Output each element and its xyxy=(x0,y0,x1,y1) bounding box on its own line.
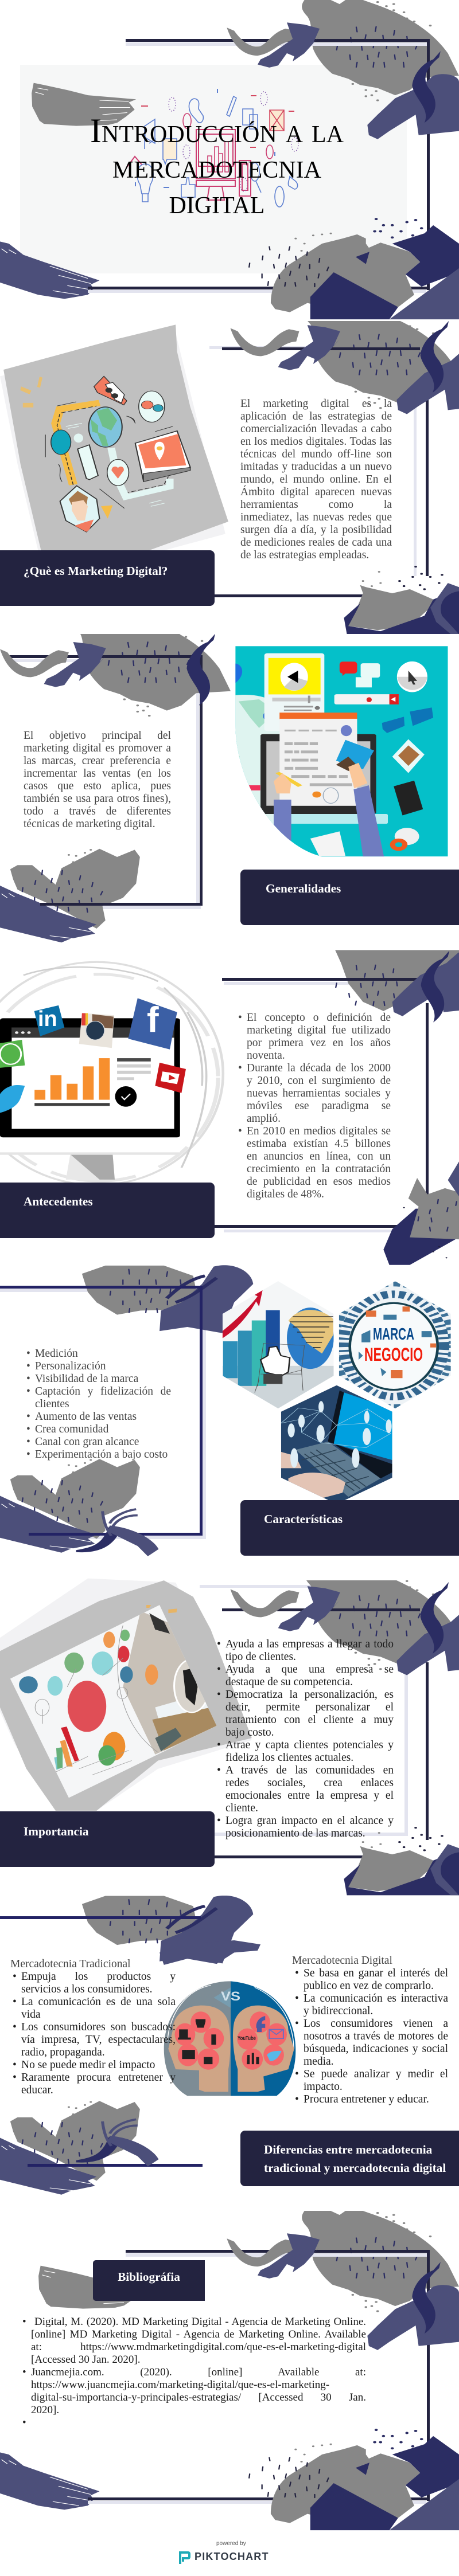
list: importancia: destaque de su competencia. xyxy=(225,1676,353,1688)
text block: traditional marketing: Empuja los productos y xyxy=(21,1971,176,1983)
text block: digital marketing: media. xyxy=(304,2056,334,2068)
text block: digital marketing: nosotros a través de motores de xyxy=(304,2030,448,2042)
text block: marketing objective xyxy=(24,730,171,830)
text block: digital marketing: y bidireccional. xyxy=(304,2005,373,2017)
list: antecedentes: de publicidad en esos medios xyxy=(247,1176,391,1188)
text block: marketing definition: comercialización llevadas a cabo xyxy=(240,423,392,435)
text block: traditional marketing: educar. xyxy=(21,2084,53,2096)
list: importancia: cliente. xyxy=(225,1802,258,1814)
text block: traditional marketing: vía impresa, TV, espectaculares, xyxy=(21,2034,176,2046)
bibliography splashes over frame xyxy=(227,2233,459,2530)
text block: marketing objective: marketing digital es promover a xyxy=(24,742,171,754)
panel: differences label: Diferencias entre mercadotecnia xyxy=(264,2143,432,2156)
list: importancia: Logra gran impacto en el alcance y xyxy=(225,1815,394,1827)
text block: marketing definition: imitadas y traducidas a un nuevo xyxy=(240,461,392,473)
title: digital xyxy=(169,183,264,221)
text block: marketing definition: El marketing digital es la xyxy=(240,398,392,410)
image labels: VS and YouTube: VS xyxy=(221,1989,240,2003)
list: antecedentes: noventa. xyxy=(247,1050,285,1062)
text block: digital marketing: Se basa en ganar el interés del xyxy=(304,1967,448,1979)
list: importancia: Atrae y capta clientes potenciales y xyxy=(225,1739,394,1751)
list: importancia: emocionales entre la empresa y el xyxy=(225,1790,394,1802)
section: what is marketing decorations xyxy=(0,308,459,634)
image: monitor with social networks xyxy=(0,962,223,1185)
image: tilted paper with strategy photo xyxy=(0,1579,252,1811)
text block: marketing definition xyxy=(240,398,392,561)
list: bibliography: at: https://www.mdmarketingdigital.com/que-es-el-marketing-digital xyxy=(31,2341,366,2353)
text block: marketing definition: en los medios digitales. Todas las xyxy=(240,436,392,448)
text block: marketing objective: todo a través de diferentes xyxy=(24,805,171,817)
text block: marketing objective: también se usa para otros fines), xyxy=(24,793,171,805)
list: bibliography: digital-su-importancia-y-principales-estrategias/ [Accessed 30 Jan. xyxy=(31,2391,366,2403)
list: bibliography xyxy=(23,2316,366,2424)
list: bibliography: https://www.juancmejia.com/marketing-digital/que-es-el-marketing- xyxy=(31,2379,329,2391)
list: bibliography: 2020]. xyxy=(31,2404,59,2416)
list: antecedentes: Durante la década de los 2000 xyxy=(247,1062,391,1074)
list: importancia: tratamiento con el cliente a muy xyxy=(225,1714,394,1726)
social logos xyxy=(38,1000,159,1040)
text block: digital marketing: Mercadotecnia Digital xyxy=(292,1955,392,1967)
text block: digital marketing: Los consumidores vienen a xyxy=(304,2018,448,2030)
list: antecedentes: en anuncios en línea, con un xyxy=(247,1150,391,1162)
text block: marketing objective: técnicas de marketing digital. xyxy=(24,818,155,830)
list: importancia: fideliza los clientes actuales. xyxy=(225,1752,353,1764)
social logos: f xyxy=(147,1000,159,1040)
text block: digital marketing: impacto. xyxy=(304,2081,343,2093)
text block: marketing definition: herramientas como la xyxy=(240,499,392,511)
section: importancia decorations xyxy=(0,1569,459,1895)
section: bibliography decorations xyxy=(0,2211,459,2510)
image labels: VS and YouTube: YouTube xyxy=(238,2035,256,2042)
list: caracteristicas: Crea comunidad xyxy=(35,1423,108,1435)
panel: bibliography label: Bibliográfia xyxy=(118,2270,180,2284)
icon: piktochart logo xyxy=(179,2551,190,2564)
text block: traditional marketing: vida xyxy=(21,2009,41,2021)
text block: marketing objective: incrementar las ventas (en los xyxy=(24,768,171,780)
list: antecedentes: amplió. xyxy=(247,1113,281,1125)
text block: traditional marketing xyxy=(10,1958,176,2096)
text block: traditional marketing: radio, propaganda. xyxy=(21,2046,105,2058)
panel: importancia label: Importancia xyxy=(24,1825,89,1838)
list: antecedentes xyxy=(239,1012,391,1200)
title xyxy=(90,112,344,221)
panel: antecedentes label: Antecedentes xyxy=(24,1195,93,1208)
text block: marketing objective: El objetivo principal del xyxy=(24,730,171,742)
section: caracteristicas decorations xyxy=(0,1265,452,1556)
list: importancia: posicionamiento de las marcas. xyxy=(225,1827,365,1839)
title: Introducción a la xyxy=(90,112,344,150)
panel: antecedentes label xyxy=(0,1183,215,1238)
image: three hexagon photos xyxy=(223,1281,452,1504)
list: caracteristicas: clientes xyxy=(35,1398,69,1410)
list: importancia: bajo costo. xyxy=(225,1727,274,1739)
list: caracteristicas: Visibilidad de la marca xyxy=(35,1373,138,1385)
list: antecedentes: El concepto o definición de xyxy=(247,1012,391,1024)
image: digital marketing illustration xyxy=(0,324,228,554)
list: antecedentes: marketing digital fue utilizado xyxy=(247,1024,391,1036)
text block: traditional marketing: No se puede medir el impacto xyxy=(21,2059,155,2071)
panel: what is marketing label xyxy=(0,550,215,606)
panel: caracteristicas label xyxy=(240,1500,459,1556)
list: caracteristicas xyxy=(27,1348,171,1461)
panel: differences label xyxy=(240,2131,459,2186)
hexagon caption: marca negocio: NEGOCIO xyxy=(364,1344,423,1365)
text block: digital marketing xyxy=(292,1955,448,2105)
list: antecedentes: crecimiento en la contratación xyxy=(247,1163,391,1175)
image: traditional versus digital heads xyxy=(164,1981,295,2096)
panel: generalidades label xyxy=(240,870,459,925)
section: diferencias decorations xyxy=(0,1896,295,2195)
list: importancia: A través de las comunidades en xyxy=(225,1764,394,1776)
list: importancia: decir, permite personalizar el xyxy=(225,1701,394,1713)
list: importancia: redes sociales, crea enlaces xyxy=(225,1777,394,1789)
panel: caracteristicas label: Características xyxy=(264,1512,343,1526)
list: caracteristicas: Medición xyxy=(35,1348,78,1360)
text block: marketing definition: surgen día a día, y la posibilidad xyxy=(240,524,392,536)
section: title decorations xyxy=(0,0,459,299)
text block: digital marketing: búsqueda, indicaciones y social xyxy=(304,2043,448,2055)
social logos: in xyxy=(38,1007,57,1031)
text block: marketing objective: casos que esto aplica, pues xyxy=(24,780,171,792)
text block: traditional marketing: La comunicación es de una sola xyxy=(21,1996,176,2008)
panel: what is marketing label: ¿Què es Marketing Digital? xyxy=(24,564,168,578)
powered by caption: powered by xyxy=(216,2540,246,2547)
list: importancia: Democratiza la personalización, es xyxy=(225,1689,394,1701)
title background panel xyxy=(20,65,407,273)
text block: traditional marketing: Mercadotecnia Tradicional xyxy=(10,1958,131,1970)
panel: bibliography label xyxy=(93,2260,205,2301)
section: antecedentes decorations xyxy=(0,950,459,1265)
text block: marketing definition: de las estrategias empleadas. xyxy=(240,549,369,561)
text block: marketing definition: mundo, el mundo online. En el xyxy=(240,473,392,486)
navy curl xyxy=(76,1509,159,1556)
text block: marketing definition: inmediatez, las nuevas redes que xyxy=(240,511,392,523)
list: importancia xyxy=(217,1638,394,1839)
hexagon caption: marca negocio: MARCA xyxy=(373,1325,414,1344)
list: caracteristicas: Captación y fidelización de xyxy=(35,1385,171,1397)
image: teal marketing desktop illustration xyxy=(235,646,448,857)
list: caracteristicas: Canal con gran alcance xyxy=(35,1436,139,1448)
panel: differences label: tradicional y mercadotecnia digital xyxy=(264,2161,446,2175)
text block: marketing definition: aplicación de las estrategias de xyxy=(240,410,392,422)
list: caracteristicas: Personalización xyxy=(35,1360,106,1372)
hexagon caption: marca negocio xyxy=(364,1325,423,1365)
list: antecedentes: estimaba existían 4.5 billones xyxy=(247,1138,391,1150)
list: bibliography: [Accessed 30 Jan. 2020]. xyxy=(31,2354,140,2366)
logo wordmark: PIKTOCHART xyxy=(195,2551,269,2562)
list: importancia: Ayuda a que una empresa se xyxy=(225,1663,394,1675)
panel: generalidades label: Generalidades xyxy=(266,882,341,895)
list: importancia: Ayuda a las empresas a llegar a todo xyxy=(225,1638,394,1650)
text block: marketing definition: Ámbito digital aparecen nuevas xyxy=(240,486,392,498)
panel: importancia label xyxy=(0,1811,215,1867)
text block: digital marketing: Procura entretener y educar. xyxy=(304,2093,429,2105)
text block: marketing definition: de mediciones reales de cada una xyxy=(240,537,392,549)
text block: marketing definition: técnicas del mundo off-line son xyxy=(240,448,392,460)
list: antecedentes: nuevas herramientas sociales y xyxy=(247,1087,391,1099)
title line-art icons xyxy=(126,89,298,207)
image labels: VS and YouTube xyxy=(221,1989,256,2042)
title: mercadotecnia xyxy=(112,147,321,185)
text block: traditional marketing: Los consumidores son buscados: xyxy=(21,2021,176,2033)
title splashes over frame xyxy=(227,22,459,319)
footer: powered by piktochart xyxy=(179,2540,269,2564)
list: antecedentes: digitales de 48%. xyxy=(247,1188,324,1200)
section: generalidades decorations xyxy=(0,616,448,942)
list: antecedentes: En 2010 en medios digitales se xyxy=(247,1125,391,1137)
list: bibliography: [online] MD Marketing Digital - Agencia de Marketing Online. Available xyxy=(31,2328,366,2340)
text block: traditional marketing: servicios a los consumidores. xyxy=(21,1983,153,1995)
list: caracteristicas: Experimentación a bajo costo xyxy=(35,1448,168,1461)
list: antecedentes: móviles ese paradigma se xyxy=(247,1100,391,1112)
list: antecedentes: y 2010, con el surgimiento de xyxy=(247,1075,391,1087)
list: caracteristicas: Aumento de las ventas xyxy=(35,1411,137,1423)
text block: digital marketing: La comunicación es interactiva xyxy=(304,1992,448,2005)
text block: traditional marketing: Raramente procura entretener y xyxy=(21,2072,176,2084)
list: importancia: tipo de clientes. xyxy=(225,1651,296,1663)
list: bibliography: Juancmejia.com. (2020). [online] Available at: xyxy=(31,2366,366,2378)
list: bibliography: Digital, M. (2020). MD Marketing Digital - Agencia de Marketing Online. xyxy=(34,2316,366,2328)
list: antecedentes: por primera vez en los años xyxy=(247,1037,391,1049)
text block: digital marketing: publico en vez de comprarlo. xyxy=(304,1980,434,1992)
text block: digital marketing: Se puede analizar y medir el xyxy=(304,2068,448,2080)
text block: marketing objective: las marcas, crear preferencia e xyxy=(24,755,171,767)
